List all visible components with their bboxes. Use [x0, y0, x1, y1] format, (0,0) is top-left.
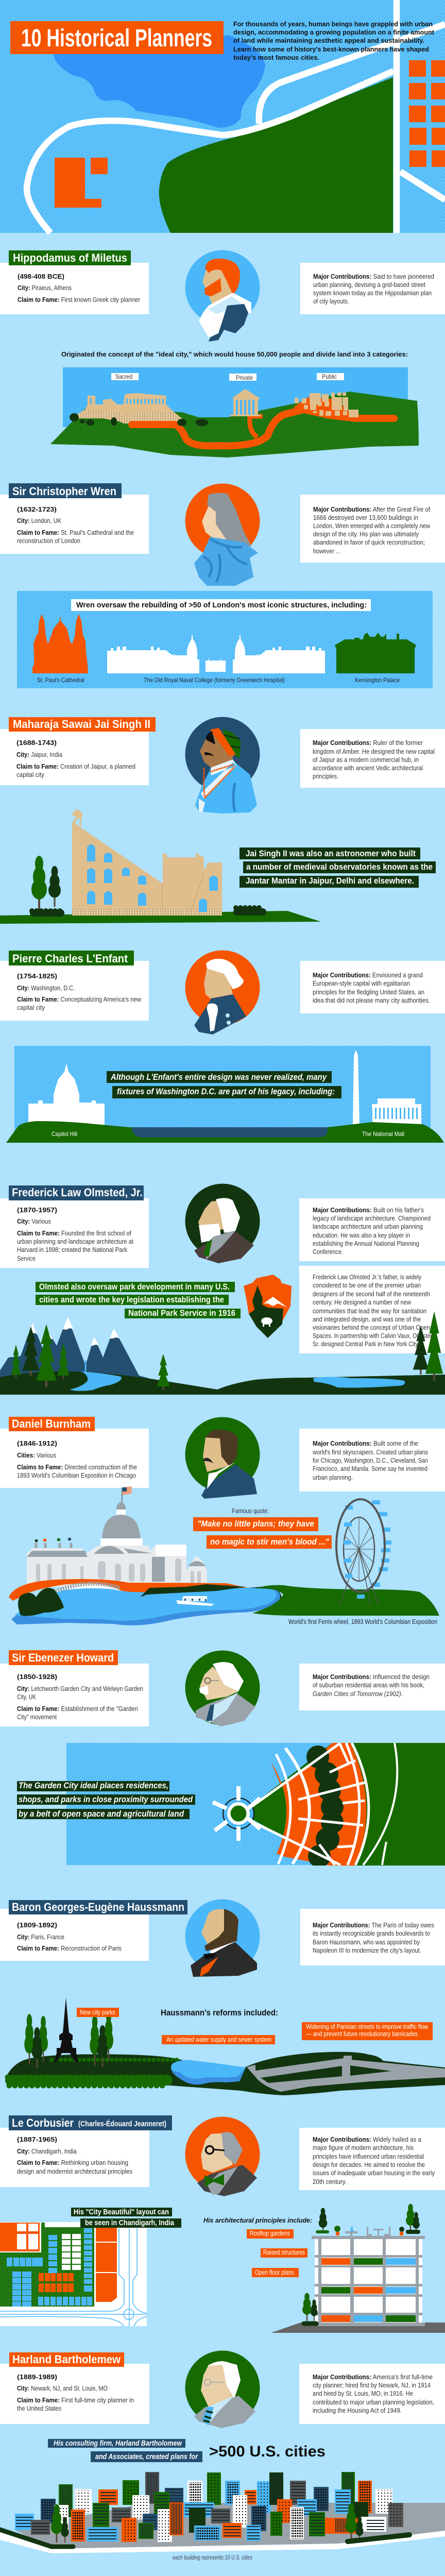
right card: accordance with ancient Vedic architectural	[313, 764, 423, 772]
right card: design of the city. His plan was ultimately	[313, 530, 419, 538]
portrait: Wren	[185, 483, 260, 586]
right card: of city layouts.	[313, 297, 349, 305]
right card 2: Frederick Law Olmsted Jr.'s father, is widely	[313, 1273, 421, 1281]
right card	[299, 2128, 445, 2190]
card: bio: Claim to Fame: Founded the first school of	[17, 1229, 131, 1237]
card: bio: capital city	[16, 771, 44, 778]
banner text: cities and wrote the key legislation establishing the	[39, 1295, 224, 1304]
portrait: L'Enfant	[185, 950, 260, 1035]
right card: of Jaipur as a modern commercial hub, in	[313, 756, 419, 764]
boulevards	[247, 2056, 445, 2092]
card: bio	[0, 729, 149, 785]
card: bio: (1850-1928)	[17, 1673, 57, 1681]
right card 1: establishing the Annual National Planning	[313, 1240, 419, 1247]
card: bio: Claim to Fame: Rethinking urban housing	[17, 2159, 128, 2166]
callouts: An updated water supply and sewer system	[166, 2036, 271, 2043]
quote	[193, 1507, 332, 1549]
right card: Major Contributions: Said to have pioneered	[313, 273, 434, 280]
banner text	[239, 848, 436, 888]
card: bio: Claim to Fame: First full-time city planner in	[17, 2396, 134, 2404]
right card: Major Contributions: Envisioned a grand	[313, 971, 423, 979]
card: bio	[0, 263, 149, 314]
card: bio: Service	[17, 1255, 36, 1262]
card: bio: (1889-1989)	[17, 2373, 57, 2381]
title	[10, 21, 224, 54]
banner text	[17, 1781, 195, 1819]
right card 1: education. He was also a key player in	[313, 1231, 410, 1239]
captions: Capitol Hill	[52, 1130, 77, 1138]
name tag: Daniel Burnham	[12, 1417, 91, 1430]
Ferris wheel	[336, 1499, 391, 1605]
callouts: — and prevent future revolutionary barricades	[306, 2030, 418, 2038]
card: bio: (1846-1912)	[17, 1439, 57, 1447]
hills	[6, 1121, 444, 1143]
name tag: Sir Christopher Wren	[12, 485, 116, 498]
callouts: Open floor plans	[255, 2269, 294, 2276]
forest	[159, 77, 393, 233]
right card: world's first skyscrapers. Created urban plans	[312, 1448, 428, 1456]
banner text: be seen in Chandigarh, India	[85, 2219, 175, 2227]
intro text: For thousands of years, human beings have grappled with urban	[233, 20, 433, 28]
banner text: by a belt of open space and agricultural land	[19, 1809, 184, 1819]
icon: National Park Service arrowhead	[244, 1275, 292, 1338]
big number: >500 U.S. cities	[209, 2443, 326, 2460]
intro text: Learn how some of history's best-known planners have shaped	[233, 45, 429, 53]
right card: Major Contributions: Influenced the design	[313, 1673, 430, 1681]
card: bio: Claim to Fame: St. Paul's Cathedral and the	[17, 529, 134, 536]
illustration: ideal city	[50, 367, 419, 457]
right card: major figure of modern architecture, his	[313, 2144, 414, 2151]
right card 2: communities that lead the way for sanitation	[313, 1307, 426, 1315]
quote: "Make no little plans; they have	[197, 1519, 314, 1529]
Capitol silhouette	[28, 1064, 105, 1126]
right card: Major Contributions: The Paris of today owes	[313, 1921, 434, 1929]
section: Le Corbusier	[0, 2115, 445, 2333]
card: bio: City, UK	[17, 1693, 36, 1701]
intro text: of land while maintaining aesthetic appeal and sustainability.	[233, 37, 424, 44]
card: bio: (498-408 BCE)	[18, 273, 64, 280]
principles heading: His architectural principles include:	[203, 2216, 312, 2224]
card: bio	[0, 495, 149, 554]
banner text: His "City Beautiful" layout can	[74, 2208, 169, 2216]
banner text: a number of medieval observatories known as the	[246, 862, 433, 872]
quote: no magic to stir men's blood ..."	[210, 1537, 329, 1547]
bank and bridge	[9, 1579, 247, 1601]
card: bio: Cities: Various	[17, 1451, 56, 1459]
heading: Originated the concept of the "ideal city," which would house 50,000 people and divide land into 3 categories:	[61, 350, 408, 358]
right card: urban planning.	[313, 1473, 353, 1481]
card: bio: the United States	[17, 2404, 61, 2412]
section: Bartholomew	[0, 2350, 445, 2561]
banner text: The Garden City ideal places residences,	[19, 1781, 168, 1790]
illustration: ideal city: Public	[322, 373, 337, 380]
right card: Major Contributions: Ruler of the former	[313, 739, 423, 747]
card: bio: City: Letchworth Garden City and Welwyn Garden	[17, 1685, 143, 1692]
card: bio: (1754-1825)	[17, 972, 57, 980]
card: bio: City: Various	[17, 1217, 51, 1225]
right card: Baron Haussmann, who was appointed by	[313, 1938, 420, 1946]
portrait: Le Corbusier	[185, 2116, 260, 2196]
illustration: national park landscape	[0, 1311, 445, 1395]
banner text	[48, 2439, 202, 2462]
banner text: Jai Singh II was also an astronomer who built	[246, 849, 416, 858]
temple	[230, 389, 261, 416]
caption: each building represents 10 U.S. cities	[173, 2554, 252, 2561]
banner text	[71, 2208, 181, 2228]
green hill	[252, 1585, 439, 1616]
callouts	[247, 2229, 307, 2277]
portrait: Burnham	[185, 1417, 260, 1499]
callouts	[77, 2008, 433, 2044]
name tag: Le Corbusier	[12, 2116, 74, 2129]
card: bio: City: Newark, NJ, and St. Louis, MO	[17, 2384, 108, 2392]
name tag: (Charles-Édouard Jeanneret)	[78, 2120, 166, 2128]
name tag: Harland Bartholemew	[12, 2353, 121, 2366]
trees	[70, 413, 208, 426]
right card 1: Conference.	[313, 1248, 343, 1256]
right card: 1666 destroyed over 13,600 buildings in	[313, 514, 418, 521]
right card: Major Contributions: America's first full-time	[313, 2373, 433, 2381]
road	[132, 410, 394, 446]
card: bio: (1809-1892)	[17, 1921, 57, 1929]
card: bio: Claims to Fame: Directed construction of the	[17, 1463, 137, 1471]
card: bio: (1688-1743)	[16, 739, 57, 747]
right card	[300, 495, 445, 563]
name tag: Sir Ebenezer Howard	[12, 1651, 114, 1664]
card: bio	[0, 2128, 149, 2187]
section: Haussmann	[0, 1899, 445, 2095]
card: bio: City: Paris, France	[17, 1933, 64, 1941]
card: bio: City: London, UK	[17, 517, 61, 524]
banner text: His consulting firm, Harland Bartholomew	[54, 2439, 182, 2448]
right card: idea that did not please many city authorities.	[313, 996, 430, 1004]
right card 2: visionaries behind the concept of Urban Open	[313, 1324, 430, 1331]
right card 2: and integrated design, and was one of the	[313, 1315, 421, 1323]
acropolis	[72, 393, 185, 425]
hero map	[0, 0, 445, 233]
card: bio: (1632-1723)	[17, 505, 57, 513]
right card	[300, 961, 445, 1013]
panel: Washington DC	[6, 1046, 444, 1143]
right card: abandoned in favor of quick reconstruction;	[313, 538, 425, 546]
right card: principles have influenced urban residential	[313, 2153, 424, 2160]
lake	[54, 35, 265, 128]
intro text	[233, 20, 435, 61]
section: Olmsted	[0, 1184, 445, 1395]
right card: urban planning, devising a grid-based street	[313, 281, 425, 289]
right card: Garden Cities of Tomorrow (1902).	[313, 1690, 403, 1698]
Washington Monument	[353, 1050, 360, 1125]
right card: including the Housing Act of 1949.	[313, 2406, 402, 2414]
callouts: Widening of Parisian streets to improve traffic flow	[306, 2023, 429, 2030]
right card: Major Contributions: After the Great Fire of	[313, 505, 430, 513]
card: bio: (1870-1957)	[17, 1206, 57, 1214]
right card	[300, 263, 445, 314]
card: bio: Claim to Fame: Creation of Jaipur, a planned	[16, 762, 135, 770]
banner text	[107, 1071, 341, 1098]
right card 1: landscape architecture and urban planning	[313, 1223, 423, 1230]
water	[11, 1588, 280, 1625]
roads	[27, 0, 445, 233]
right card: European-style capital with egalitarian	[313, 979, 410, 987]
right card 2: designers of the second half of the nineteenth	[313, 1290, 430, 1298]
right card: Major Contributions: Widely hailed as a	[313, 2136, 422, 2143]
banner text: Jantar Mantar in Jaipur, Delhi and elsewhere.	[246, 876, 414, 886]
building	[27, 1486, 207, 1587]
card: bio	[0, 1429, 149, 1488]
name tag: Pierre Charles L'Enfant	[12, 952, 128, 965]
card: bio: City: Piraeus, Athens	[18, 284, 72, 292]
panel: London landmarks: Kensington Palace	[355, 676, 400, 684]
name tag: Baron Georges-Eugène Haussmann	[12, 1901, 184, 1913]
card: bio: 1893 World's Columbian Exposition in Chicago	[17, 1471, 136, 1479]
right card 2: Sr. designed Central Park in New York City.	[313, 1340, 419, 1348]
banner text	[36, 1282, 241, 1318]
right card: Napoleon III to modernize the city's layout.	[313, 1946, 421, 1954]
section: Jai Singh	[0, 717, 445, 924]
banner text: National Park Service in 1916	[128, 1309, 235, 1318]
banner text: and Associates, created plans for	[95, 2453, 198, 2461]
card: bio: urban planning and landscape architecture at	[17, 1238, 133, 1245]
labels: Sacred	[115, 373, 132, 380]
right card: principles for the fledgling United States, an	[313, 988, 424, 996]
orange blocks	[55, 60, 445, 208]
right card: however ...	[313, 547, 340, 555]
card: bio	[0, 961, 149, 1021]
Lincoln Memorial	[372, 1098, 421, 1125]
card: bio	[0, 1664, 149, 1726]
callouts: Raised structures	[263, 2249, 305, 2256]
portrait: Bartholomew	[185, 2350, 260, 2428]
title: 10 Historical Planners	[21, 25, 212, 52]
panel: Washington DC: The National Mall	[362, 1130, 404, 1138]
card: bio	[0, 1909, 149, 1961]
card: bio: City: Chandigarh, India	[17, 2147, 77, 2155]
plan: Chandigarh	[0, 2222, 147, 2326]
right card: principles.	[313, 772, 338, 780]
portrait: Haussmann	[185, 1899, 260, 1977]
right card	[300, 1909, 445, 1965]
card: bio: Claim to Fame: Conceptualizing America's new	[17, 995, 142, 1003]
banner: Wren oversaw the rebuilding of >50 of London's most iconic structures, including:	[76, 601, 367, 609]
card: bio	[0, 1198, 149, 1268]
intro text: today's most famous cities.	[233, 54, 319, 61]
right card: design for decades. He aimed to resolve the	[313, 2161, 425, 2168]
card: bio: capital city	[17, 1004, 45, 1011]
right card	[299, 1429, 445, 1492]
right card 2: century. He designed a number of new	[313, 1298, 412, 1306]
card: bio: City: Jaipur, India	[16, 751, 63, 758]
St Paul's silhouette	[32, 614, 88, 673]
Kensington Palace silhouette	[335, 633, 416, 673]
right card: 20th century.	[313, 2178, 347, 2185]
right card	[300, 729, 445, 788]
right card: Major Contributions: Built some of the	[313, 1439, 418, 1447]
banner	[71, 599, 371, 611]
section: Burnham	[0, 1417, 445, 1625]
name tag: Frederick Law Olmsted, Jr.	[12, 1186, 143, 1199]
houses	[295, 393, 358, 417]
illustration: city skyline	[0, 2472, 445, 2553]
right card 1	[299, 1198, 445, 1261]
right card: Francisco, and Manila. Some say he invented	[313, 1465, 427, 1472]
right card: of suburban residential areas with his book,	[313, 1681, 424, 1689]
trees	[18, 1588, 64, 1616]
portrait: Olmsted	[185, 1184, 260, 1263]
panel: London landmarks: The Old Royal Naval College (formerly Greenwich Hospital)	[144, 676, 285, 684]
boat	[176, 1596, 214, 1606]
intro text: design, accommodating a growing population on a finite amount	[233, 28, 435, 36]
banner text: Although L'Enfant's entire design was never realized, many	[110, 1073, 327, 1082]
portrait: Howard	[185, 1651, 260, 1726]
portrait: Jai Singh	[185, 717, 260, 814]
card: bio: Claim to Fame: Establishment of the "Garden	[17, 1705, 138, 1713]
panel: garden city plan	[66, 1743, 445, 1868]
portrait: Hippodamus	[185, 250, 260, 342]
captions: St. Paul's Cathedral	[37, 676, 84, 684]
card: bio: design and modernist architectural principles	[17, 2167, 132, 2175]
section: Howard	[0, 1650, 445, 1868]
callouts: Rooftop gardens	[250, 2230, 290, 2237]
card: bio: (1887-1965)	[17, 2136, 57, 2143]
banner text: Olmsted also oversaw park development in many U.S.	[39, 1282, 230, 1292]
right card	[299, 1664, 445, 1710]
card: bio: Harvard in 1898; created the National Park	[17, 1246, 127, 1253]
section: Hippodamus	[0, 250, 445, 457]
reform heading: Haussmann's reforms included:	[161, 2008, 278, 2018]
illustration: Jantar Mantar	[0, 809, 321, 924]
banner text: shops, and parks in close proximity surrounded	[19, 1795, 193, 1804]
right card 2	[299, 1266, 445, 1353]
banner text: fixtures of Washington D.C. are part of his legacy, including:	[117, 1087, 335, 1096]
right card 2: considered to be one of the premier urban	[313, 1281, 421, 1289]
card: bio: Claim to Fame: Reconstruction of Paris	[17, 1944, 122, 1952]
card: bio: City: Washington, D.C.	[17, 984, 75, 992]
illustration: Columbian Exposition	[9, 1486, 439, 1625]
right card	[299, 2364, 445, 2424]
callouts: New city parks	[80, 2009, 115, 2016]
name tag	[9, 2115, 172, 2130]
illustration: modernist building	[271, 2204, 445, 2333]
card: bio	[0, 2364, 149, 2424]
right card: and hired by St. Louis, MO, in 1916. He	[313, 2389, 413, 2397]
section: L'Enfant	[0, 950, 445, 1143]
card: bio: reconstruction of London	[17, 537, 80, 545]
quote: Famous quote:	[232, 1507, 269, 1515]
illustration: ideal city: Private	[236, 374, 253, 381]
illustration: Paris	[7, 1997, 445, 2095]
card: bio: City" movement	[17, 1713, 57, 1721]
Eiffel Tower	[54, 1997, 79, 2062]
Old Royal Naval College silhouette	[107, 635, 325, 673]
name tag: Hippodamus of Miletus	[13, 251, 127, 264]
section: Wren	[0, 483, 445, 688]
panel: London landmarks	[17, 591, 433, 688]
name tag: Maharaja Sawai Jai Singh II	[13, 718, 150, 731]
card: bio: Claim to Fame: First known Greek city planner	[18, 296, 141, 303]
right card 1: Major Contributions: Built on his father's	[313, 1206, 424, 1214]
